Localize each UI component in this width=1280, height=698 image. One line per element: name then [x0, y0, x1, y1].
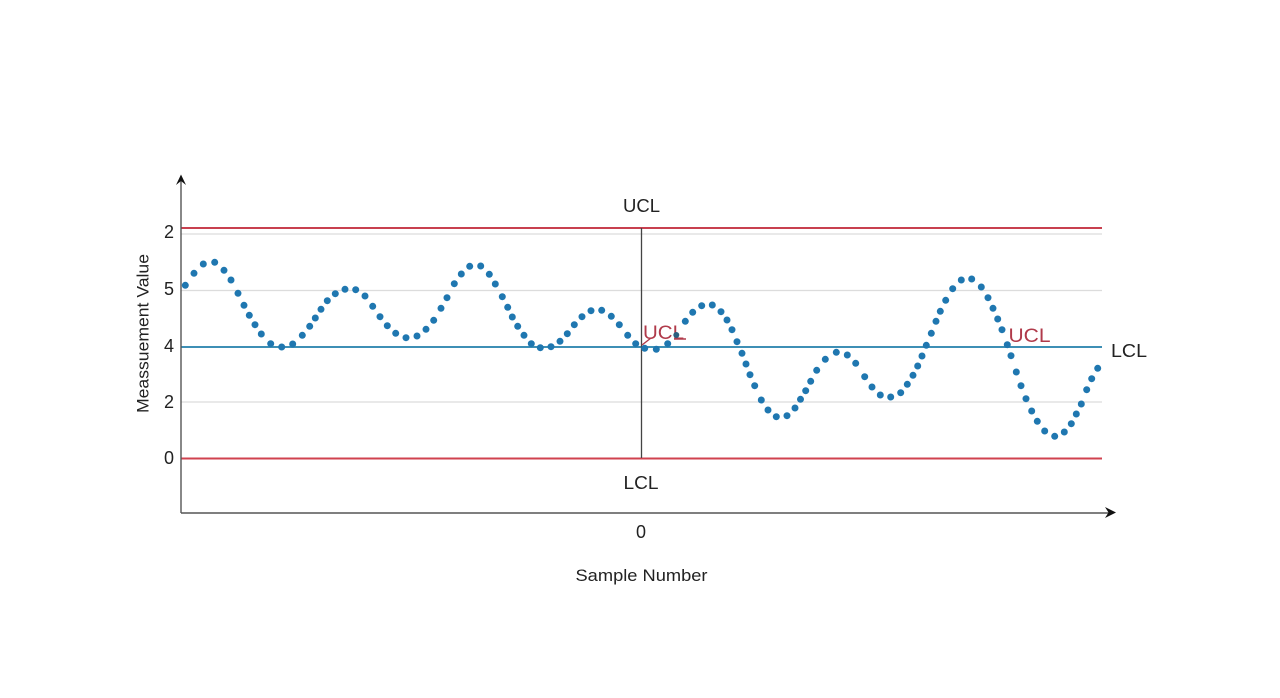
x axis zero label: 0	[636, 522, 646, 542]
y axis with arrow	[176, 174, 186, 513]
x axis title: Sample Number	[576, 566, 708, 585]
bottom LCL label: LCL	[624, 473, 658, 493]
center red UCL callout: UCL	[643, 322, 684, 344]
lower control limit line	[181, 458, 1102, 460]
vertical divider at sample zero	[640, 228, 642, 458]
right red UCL callout: UCL	[1008, 325, 1051, 347]
y axis tick labels: 0	[164, 448, 174, 468]
right LCL label: LCL	[1111, 341, 1147, 361]
center line	[181, 346, 1102, 348]
y axis title: Meassuement Value	[134, 254, 152, 413]
x axis with arrow	[181, 507, 1116, 518]
upper control limit line	[181, 227, 1102, 229]
y axis tick labels: 4	[164, 336, 174, 356]
y axis tick labels: 5	[164, 279, 174, 299]
top UCL label: UCL	[623, 196, 660, 216]
y axis tick labels: 2	[164, 222, 174, 242]
y axis tick labels: 2	[164, 392, 174, 412]
data points	[182, 259, 1101, 440]
y axis tick labels	[164, 222, 174, 468]
